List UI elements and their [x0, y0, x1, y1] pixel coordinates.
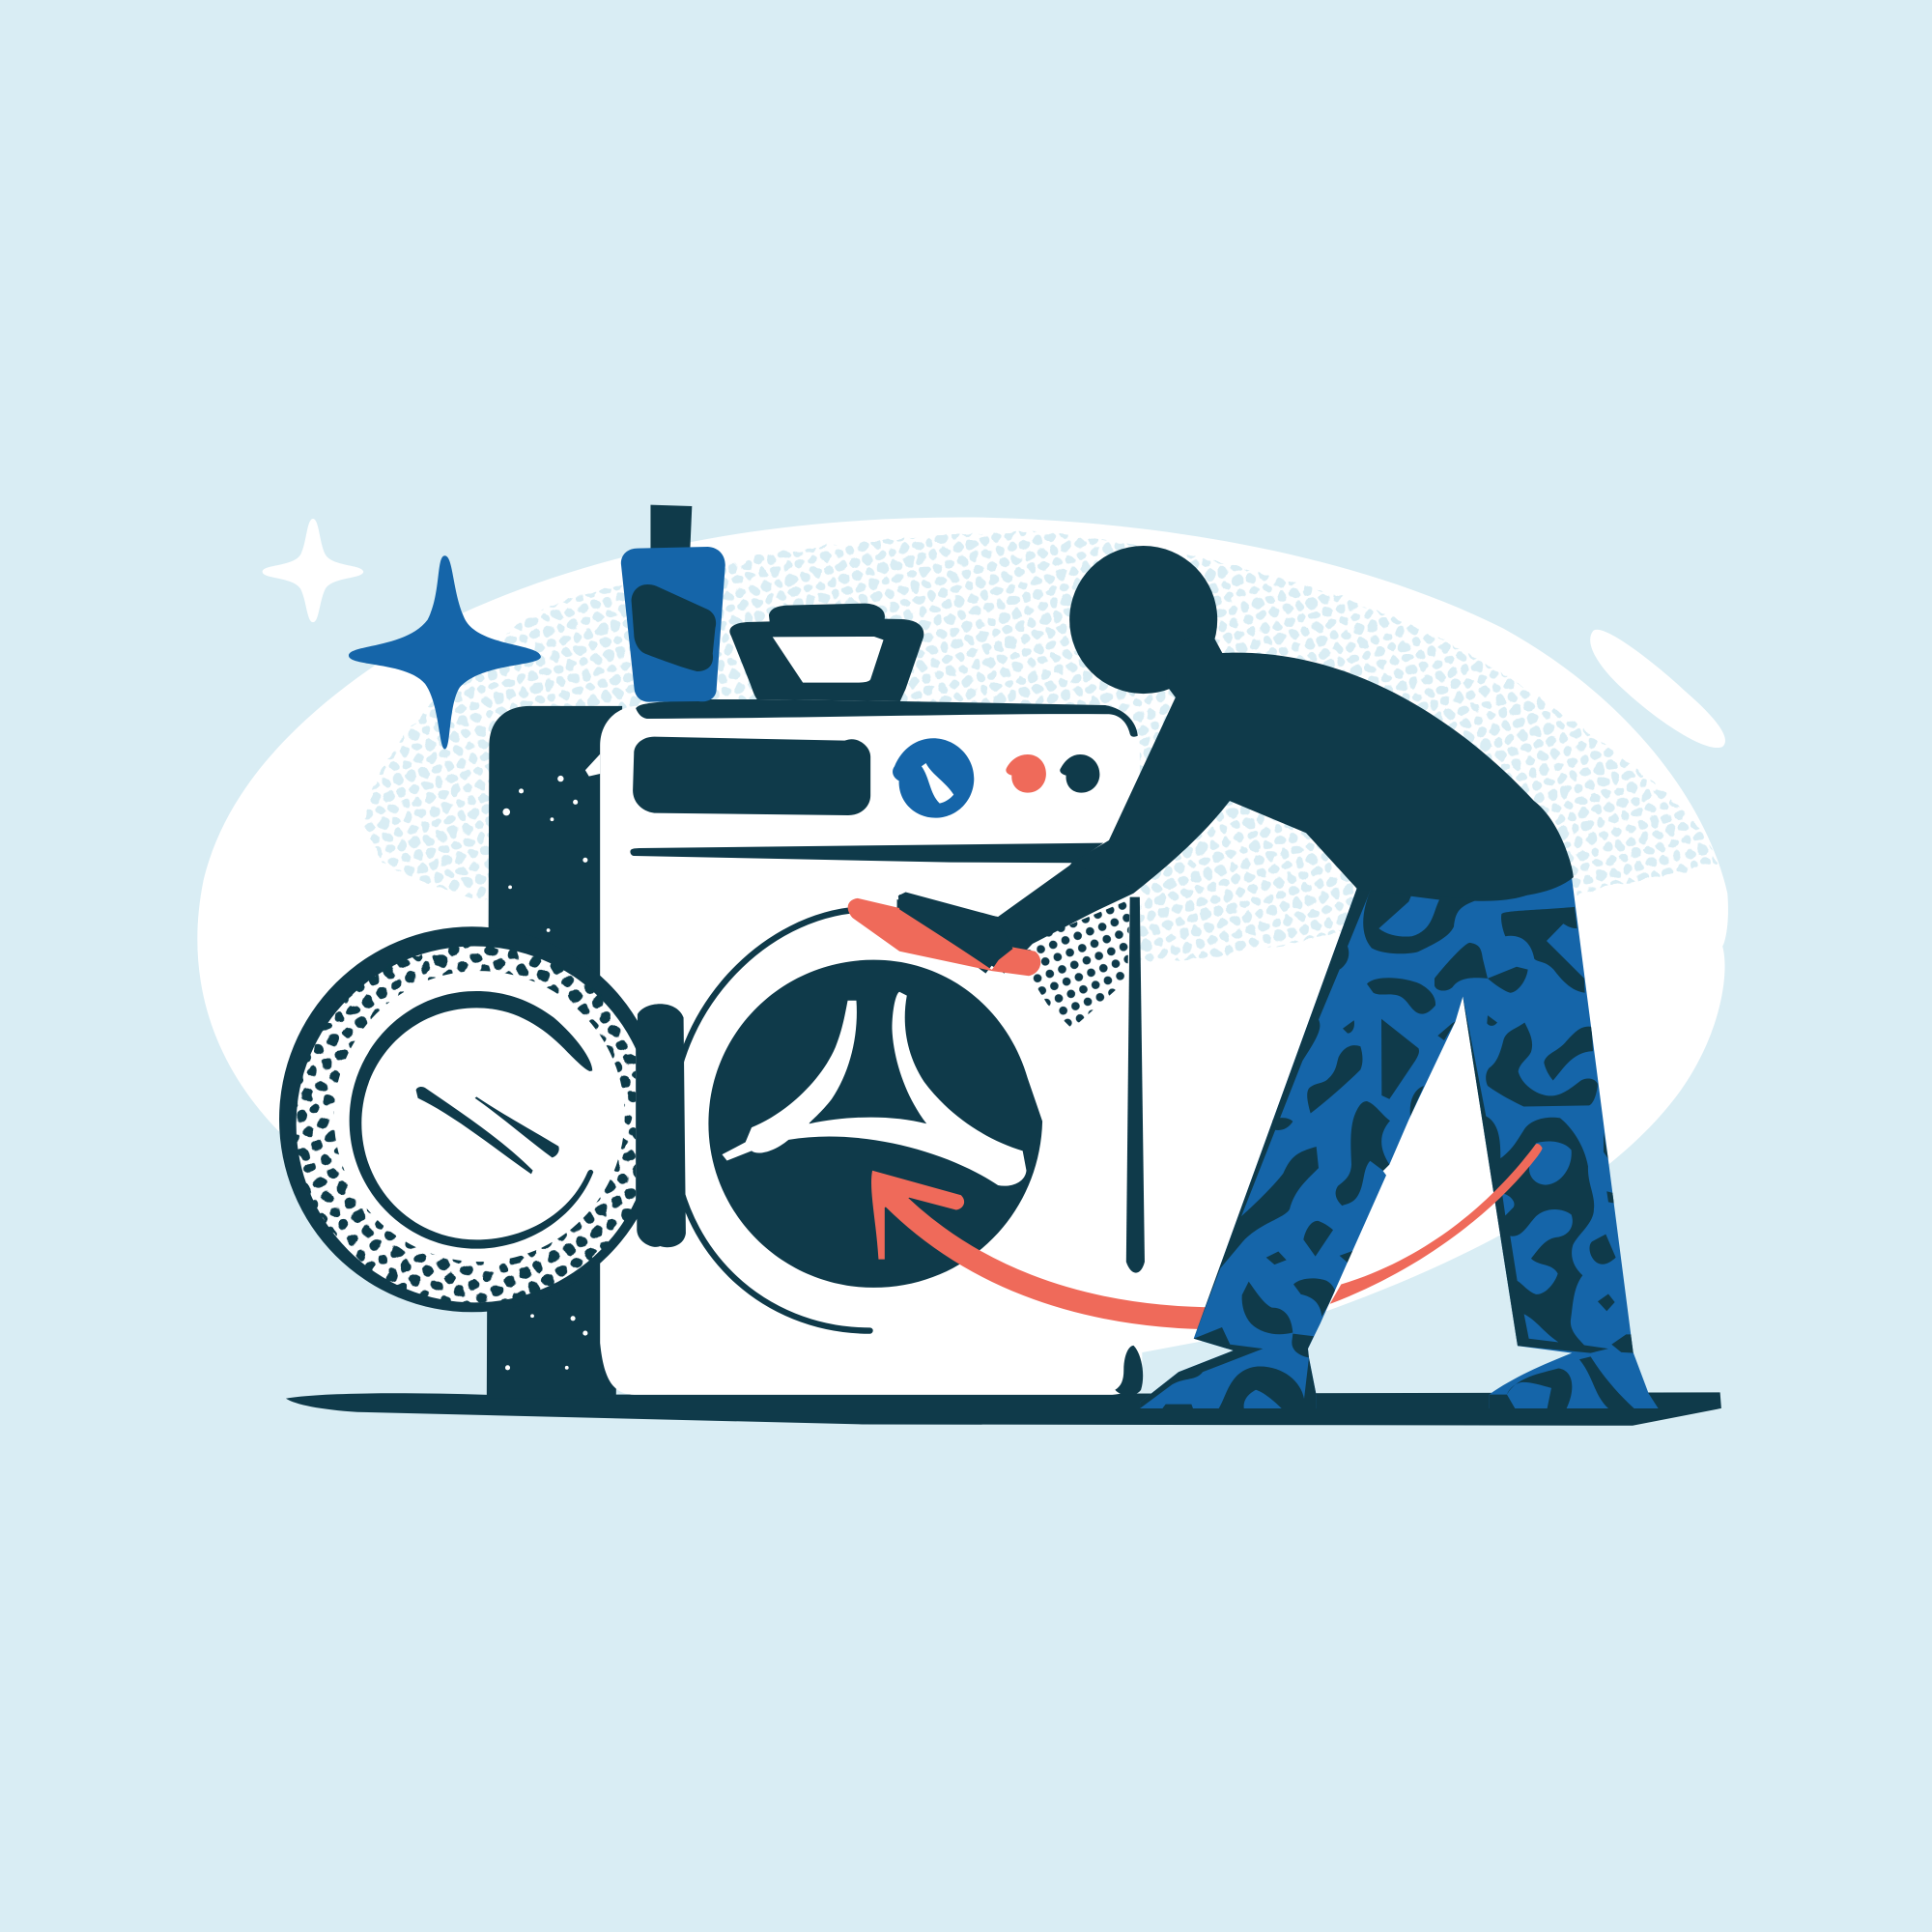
folded laundry basket — [729, 604, 923, 701]
machine side — [487, 706, 622, 1399]
blue dial — [893, 738, 974, 818]
control panel top — [630, 699, 1138, 863]
drum — [708, 960, 1042, 1288]
right edge line — [1126, 897, 1145, 1273]
torso and arm — [897, 634, 1574, 974]
halftone shade on blob — [365, 532, 1719, 964]
dark button — [1060, 754, 1099, 793]
pink arrow tail — [887, 1193, 1233, 1319]
pants blue insets — [1378, 896, 1573, 1343]
blue sparkle — [349, 555, 541, 750]
door halftone ring — [295, 945, 654, 1304]
white dash right — [1590, 630, 1725, 748]
washing machine — [487, 699, 1145, 1399]
pants — [1140, 878, 1658, 1408]
pink arrow line over leg — [1330, 1144, 1543, 1304]
door glare — [416, 1087, 559, 1174]
panel line — [630, 843, 1103, 863]
white blob — [197, 518, 1728, 1353]
red button — [1006, 754, 1046, 793]
top edge — [636, 699, 1138, 737]
bottom right corner — [1115, 1346, 1143, 1396]
specks on side — [502, 754, 600, 1370]
open door — [279, 926, 686, 1312]
arrow head — [871, 1171, 964, 1260]
display panel — [633, 737, 870, 815]
detergent bottle — [621, 505, 725, 702]
infographic: person loading washing machine — [197, 504, 1728, 1426]
floor — [286, 1392, 1721, 1426]
door opening arc — [671, 909, 870, 1331]
small white sparkle — [263, 519, 363, 622]
halftone inside machine — [1012, 899, 1130, 1029]
head — [1069, 546, 1217, 694]
machine body — [600, 705, 1142, 1395]
arm to hand — [897, 864, 1137, 974]
person — [897, 546, 1693, 1424]
hinge — [637, 1004, 686, 1247]
door glass ring — [350, 991, 593, 1249]
drum paddles — [722, 992, 1026, 1186]
person hand over cloth — [898, 892, 1012, 967]
red cloth — [848, 898, 1040, 976]
door inner white — [334, 971, 625, 1262]
